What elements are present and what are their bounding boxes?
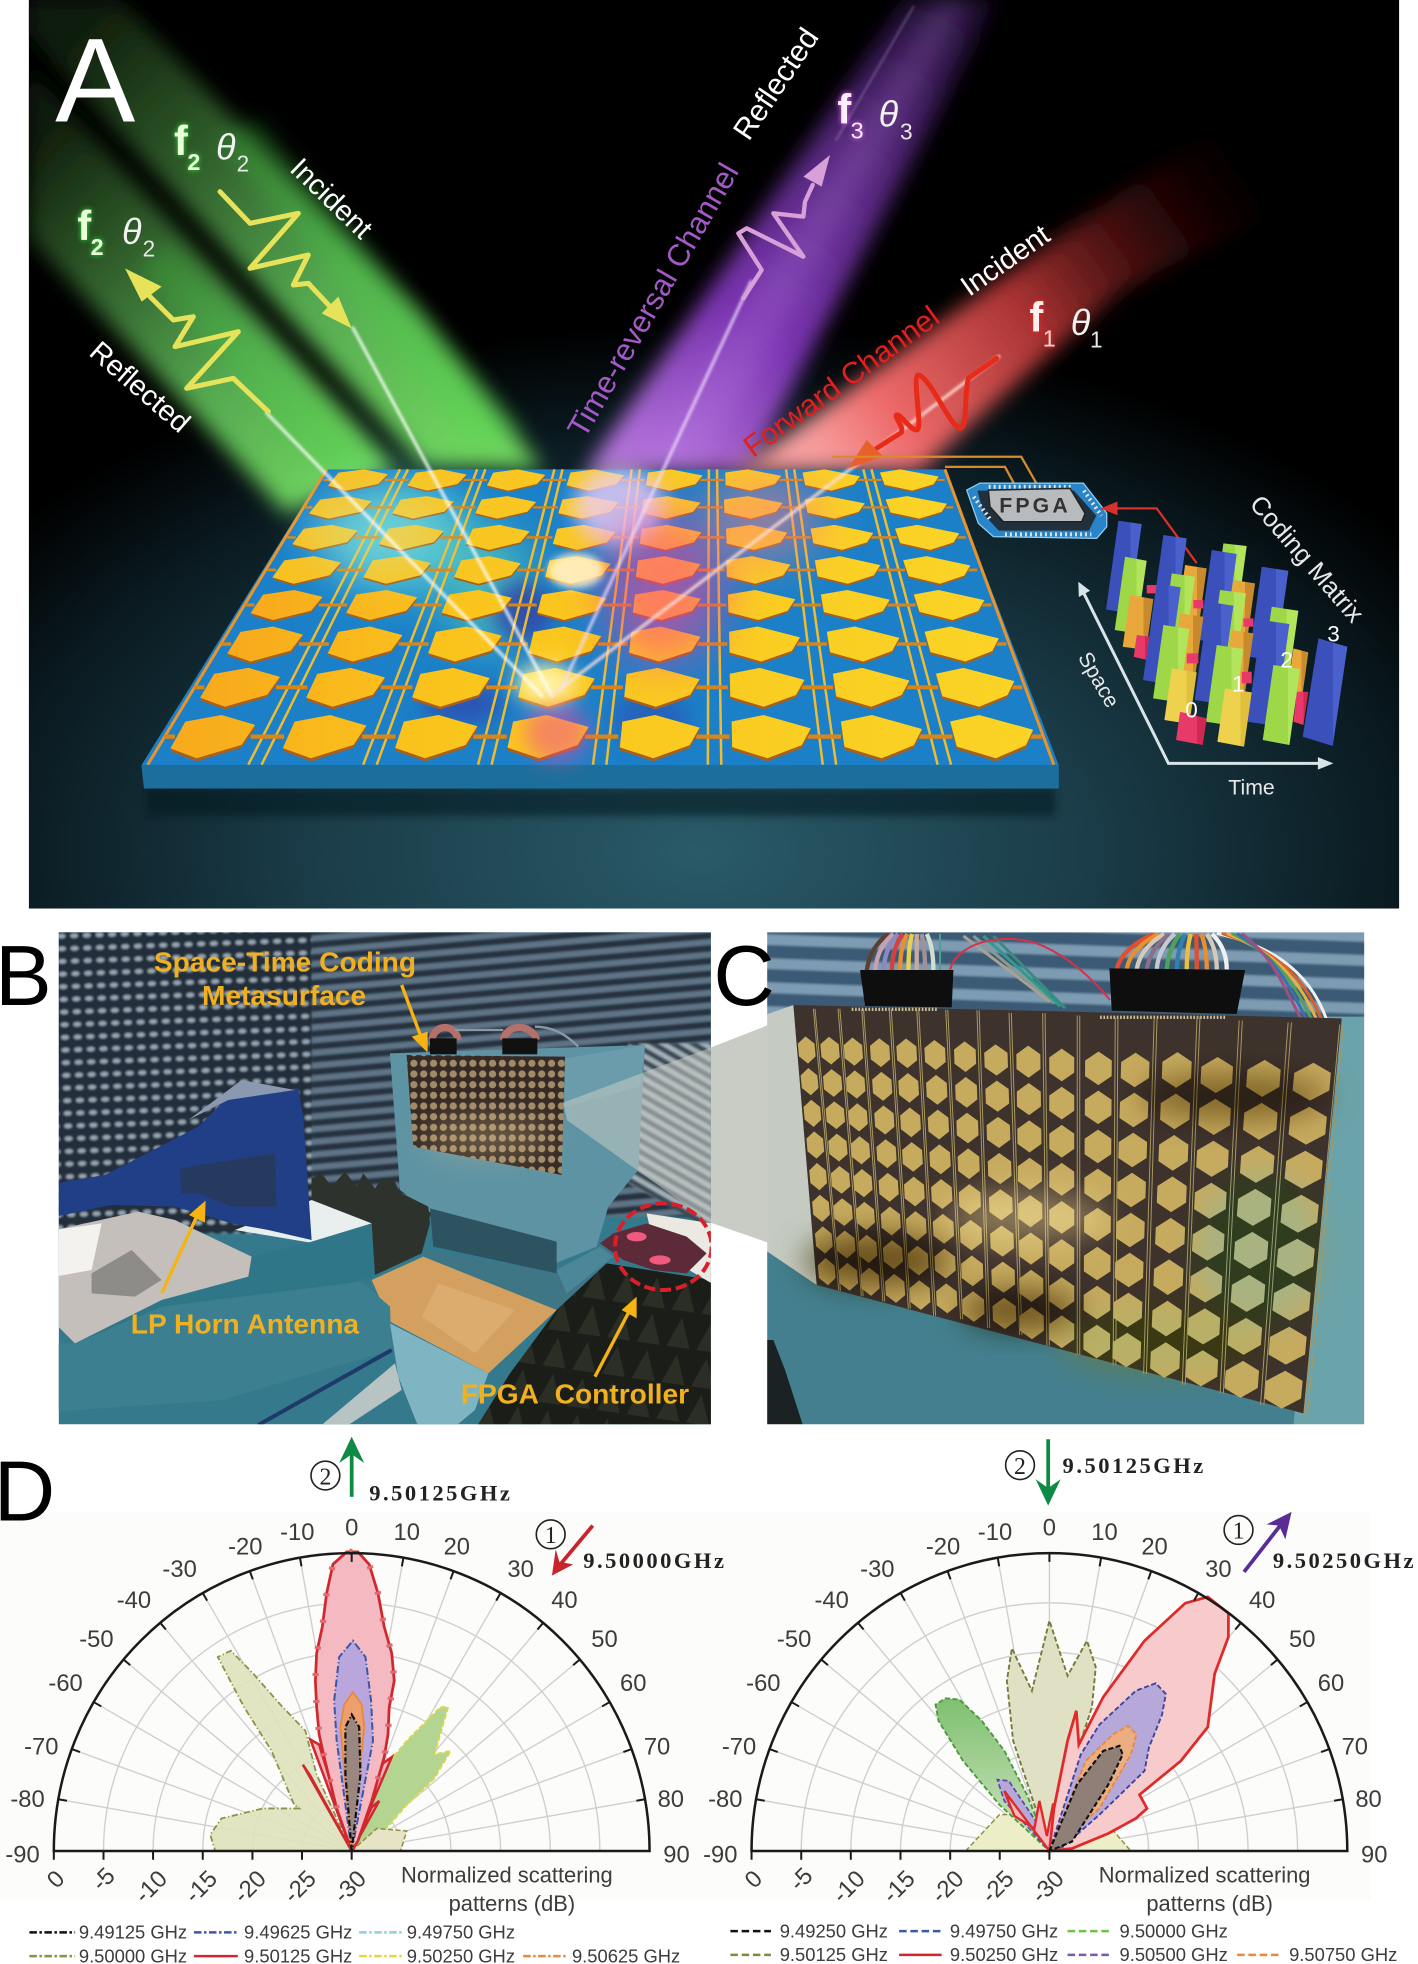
polar grid left <box>58 1553 645 1851</box>
FPGA controller board <box>600 1223 707 1273</box>
background wall left <box>55 930 313 1233</box>
incident wave, green channel <box>220 192 352 328</box>
label f1 theta1: f <box>1029 294 1043 341</box>
legend right: 9.49750 GHz <box>950 1920 1058 1941</box>
FPGA chip <box>967 483 1107 538</box>
angle labels right: 80 <box>1355 1786 1382 1813</box>
label f1 theta1: 1 <box>1090 327 1103 353</box>
angle labels left: 40 <box>551 1587 578 1614</box>
angle labels right: -10 <box>978 1519 1012 1546</box>
bright reflection on patches <box>947 1190 1107 1243</box>
label space-time coding metasurface: Space-Time Coding <box>154 947 416 978</box>
dim reflection lower left <box>803 1233 950 1287</box>
green incident beam <box>29 0 543 469</box>
shadow under the board <box>148 788 1055 816</box>
lobe 9.50250 GHz <box>1049 1597 1228 1851</box>
bar level numbers <box>1185 621 1340 723</box>
axis title right <box>1099 1862 1310 1916</box>
black absorber cones <box>312 1172 430 1275</box>
angle labels right: -50 <box>777 1626 811 1653</box>
label f2 theta2 incident: f <box>174 117 188 164</box>
polar frame left <box>54 1553 650 1860</box>
label f2 theta2 incident: 2 <box>237 151 249 177</box>
label f2 theta2 reflected <box>77 202 155 262</box>
angle labels right: 70 <box>1342 1734 1368 1761</box>
hexagon patch array <box>164 469 1041 761</box>
frequency label 9.50125 left: 9.50125GHz <box>369 1481 512 1506</box>
white top of foam step <box>235 1200 372 1243</box>
label f2 theta2 reflected: 2 <box>143 236 155 262</box>
label space-time coding metasurface: Metasurface <box>202 980 366 1011</box>
label f1 theta1 <box>1028 298 1102 350</box>
legend right <box>730 1920 1397 1964</box>
radial axis labels left: -10 <box>129 1865 173 1909</box>
dull top right reflection <box>1140 1073 1327 1120</box>
frequency label 9.50250: 9.50250GHz <box>1273 1548 1416 1573</box>
angle labels left: 50 <box>591 1626 618 1653</box>
radial axis labels left: -5 <box>87 1862 121 1896</box>
label time: Time <box>1228 776 1275 800</box>
label reflected green: Reflected <box>83 335 196 439</box>
circled 1 right <box>1224 1516 1253 1545</box>
white light patch on foam <box>55 1223 102 1277</box>
left connector <box>860 970 953 1007</box>
label coding matrix: Coding Matrix <box>1244 490 1369 628</box>
panel A background <box>29 0 1399 909</box>
angle labels left: -60 <box>48 1670 83 1697</box>
angle labels right: 0 <box>1043 1515 1056 1542</box>
label incident green: Incident <box>284 152 378 245</box>
circled 1 left: 1 <box>545 1523 557 1549</box>
wall floor behind wood <box>425 1250 602 1310</box>
radial axis labels right: -30 <box>1026 1865 1070 1909</box>
angle labels left <box>5 1515 690 1868</box>
radial axis labels right: -20 <box>926 1865 969 1909</box>
lobe 9.49250 GHz <box>1049 1746 1123 1851</box>
background wall right <box>312 930 712 1217</box>
back wall stripes <box>760 930 1370 1027</box>
label f2 theta2 incident: 2 <box>187 149 200 175</box>
metasurface board top <box>141 469 1059 765</box>
photo C background <box>760 930 1370 1427</box>
right ribbon cable <box>1117 934 1227 969</box>
axis title left <box>401 1862 613 1916</box>
radial axis labels left: 0 <box>42 1865 70 1894</box>
shadow patch on foam <box>92 1250 162 1297</box>
axis title right: Normalized scattering <box>1099 1862 1310 1887</box>
angle labels right: 40 <box>1249 1587 1275 1614</box>
panel A: space-time coding metasurface illustration <box>29 0 1399 909</box>
panel D right: polar scattering pattern <box>703 1515 1387 1916</box>
left ribbon cable <box>867 934 940 971</box>
low side lobe <box>966 1813 1131 1851</box>
angle labels right: 50 <box>1289 1626 1315 1653</box>
lobe 9.50000 GHz <box>936 1698 1049 1851</box>
lobe 9.49625 GHz <box>334 1641 373 1851</box>
dark corner <box>760 1340 803 1427</box>
legend left <box>29 1922 680 1964</box>
projection wedge in the gap <box>711 1025 768 1243</box>
label f2 theta2 reflected: f <box>77 202 91 249</box>
projection wedge in photo C <box>760 1005 817 1285</box>
panel D left: polar scattering pattern <box>5 1515 690 1916</box>
label f2 theta2 reflected: θ <box>122 211 142 252</box>
red incident beam <box>734 156 1240 470</box>
right trailing ribbon <box>1217 933 1327 1020</box>
radial axis labels right: 0 <box>740 1865 768 1894</box>
lobe 9.50500 GHz <box>1049 1683 1166 1851</box>
radial axis labels right: -5 <box>784 1862 818 1896</box>
projection wedge across photo B <box>563 1048 711 1223</box>
axis title right: patterns (dB) <box>1146 1891 1273 1916</box>
dim reflection lower centre <box>960 1290 1080 1330</box>
circled 2 right: 2 <box>1014 1454 1026 1480</box>
angle labels left: 90 <box>663 1841 690 1868</box>
frequency label 9.50125 right: 9.50125GHz <box>1063 1453 1206 1478</box>
polar grid right <box>756 1553 1343 1851</box>
lobe 9.50125 GHz <box>315 1552 394 1851</box>
patches <box>795 1008 1343 1416</box>
panel C: metasurface close-up <box>760 930 1370 1427</box>
teal ribbon cable <box>963 936 1065 1008</box>
angle labels left: 10 <box>394 1519 420 1546</box>
radial axis labels left: -30 <box>328 1865 372 1909</box>
angle labels left: 30 <box>507 1556 534 1583</box>
lobe 9.50125 GHz <box>1007 1621 1096 1851</box>
angle labels right: 20 <box>1141 1533 1168 1560</box>
label incident red: Incident <box>955 219 1056 303</box>
angle labels right: -90 <box>703 1841 737 1868</box>
label f3 theta3: 3 <box>851 117 864 143</box>
panel B: measurement photo <box>55 930 712 1427</box>
radial axis labels right <box>740 1862 1070 1909</box>
photo base <box>55 930 712 1427</box>
radial axis labels left <box>42 1862 372 1909</box>
white foam block <box>55 1212 252 1343</box>
red arrow <box>552 1526 593 1576</box>
angle labels right: -70 <box>722 1734 756 1761</box>
lobe 9.50625 GHz <box>340 1692 364 1851</box>
panel label C: C <box>713 929 775 1024</box>
reflected wave, purple channel <box>738 155 830 298</box>
angle labels left: -80 <box>10 1786 45 1813</box>
angle labels left: -50 <box>79 1626 114 1653</box>
label LP horn antenna: LP Horn Antenna <box>131 1308 359 1339</box>
angle labels right: 90 <box>1361 1841 1387 1868</box>
white floor strip <box>322 1363 402 1425</box>
label FPGA controller: FPGA Controller <box>461 1378 689 1409</box>
red wire <box>950 939 1110 1000</box>
red spikes <box>303 1740 392 1851</box>
foam tower <box>390 1045 645 1263</box>
angle labels left: 20 <box>444 1533 470 1560</box>
metasurface board side <box>141 765 1059 788</box>
greenish reflection <box>1197 1173 1323 1327</box>
lobe 9.50000 GHz <box>210 1651 352 1851</box>
circled 2 left <box>311 1461 340 1490</box>
circled 1 right: 1 <box>1233 1519 1244 1545</box>
lobe 9.49125 GHz <box>345 1715 360 1851</box>
angle labels right: -30 <box>860 1556 895 1583</box>
incident wave, red channel <box>848 358 997 468</box>
radial axis labels right: -10 <box>827 1865 871 1909</box>
label f1 theta1: 1 <box>1043 326 1056 352</box>
gold bias lines <box>148 469 1054 765</box>
legend left: 9.49750 GHz <box>407 1922 515 1943</box>
coding matrix bars <box>1106 521 1347 747</box>
green arrow left <box>339 1437 364 1497</box>
frequency label 9.50000: 9.50000GHz <box>583 1548 726 1573</box>
angle labels left: -10 <box>280 1519 314 1546</box>
space and time axes <box>1078 582 1333 770</box>
black absorber floor <box>477 1263 712 1427</box>
radial axis labels right: -15 <box>877 1865 921 1909</box>
pale foam block <box>390 1323 488 1427</box>
lobe 9.50750 GHz <box>1049 1726 1136 1851</box>
angle labels left: -20 <box>228 1533 262 1560</box>
feed lines to FPGA <box>832 457 1036 483</box>
red control arrow <box>1103 503 1197 563</box>
label f2 theta2 incident <box>174 117 249 177</box>
label space: Space <box>1073 648 1124 712</box>
purple arrow <box>1244 1512 1292 1572</box>
radial axis labels left: -15 <box>180 1865 223 1909</box>
angle labels right <box>703 1515 1387 1868</box>
foam step one <box>75 1223 375 1343</box>
chart background <box>0 1512 1370 1900</box>
angle labels right: -40 <box>814 1587 849 1614</box>
angle labels right: -20 <box>926 1533 960 1560</box>
circled 1 left <box>536 1520 565 1549</box>
lower wall section <box>628 1043 712 1230</box>
legend left: 9.49125 GHz <box>79 1922 187 1943</box>
bar level numbers: 2 <box>1280 648 1293 673</box>
small purple lobe <box>997 1780 1049 1851</box>
purple reflected beam <box>586 0 995 471</box>
plastic wrap on horn <box>188 1080 295 1120</box>
under-tower dark band <box>430 1208 557 1273</box>
white area behind FPGA <box>647 1213 712 1283</box>
olive lower reflection <box>1060 1307 1260 1373</box>
legend left: 9.49625 GHz <box>244 1922 352 1943</box>
reflected wave, green channel <box>125 268 268 412</box>
tower foot <box>557 1247 613 1293</box>
miniature metasurface <box>407 1055 565 1175</box>
wood floor <box>372 1257 557 1373</box>
polar frame right <box>752 1553 1347 1860</box>
label f2 theta2 incident: θ <box>216 126 236 167</box>
radial axis labels left: -20 <box>228 1865 272 1909</box>
red sidelobes <box>1004 1791 1056 1851</box>
FPGA dashed circle <box>615 1203 712 1290</box>
FPGA led glow <box>627 1232 671 1265</box>
label time-reversal channel: Time-reversal Channel <box>560 157 746 443</box>
angle labels right: -80 <box>708 1786 742 1813</box>
angle labels right: -60 <box>746 1670 780 1697</box>
angle labels left: -40 <box>117 1587 151 1614</box>
label forward channel: Forward Channel <box>737 299 946 464</box>
legend right: 9.49250 GHz <box>780 1920 888 1941</box>
angle labels left: 70 <box>644 1734 670 1761</box>
radial axis labels right: -25 <box>976 1865 1020 1909</box>
axis title left: Normalized scattering <box>401 1862 613 1887</box>
angle labels left: -90 <box>5 1841 40 1868</box>
radial axis labels left: -25 <box>278 1865 322 1909</box>
arrows in photo B <box>162 985 637 1377</box>
legend right: 9.50000 GHz <box>1120 1920 1228 1941</box>
horn antenna body <box>55 1088 312 1240</box>
label f3 theta3: θ <box>879 94 899 135</box>
small lobe right <box>352 1828 407 1851</box>
label f2 theta2 reflected: 2 <box>91 234 104 260</box>
label f3 theta3 <box>837 85 913 144</box>
angle labels right: 30 <box>1205 1556 1232 1583</box>
pin headers <box>852 1009 1227 1017</box>
angle labels right: 60 <box>1318 1670 1344 1697</box>
label f3 theta3: 3 <box>900 118 913 144</box>
circled 2 right <box>1006 1451 1034 1480</box>
FPGA chip: FPGA <box>999 493 1071 517</box>
axis title left: patterns (dB) <box>449 1891 575 1916</box>
foam step two <box>55 1282 392 1412</box>
navy floor strip <box>258 1350 392 1425</box>
white beam cores <box>267 6 999 696</box>
label space-time coding metasurface <box>154 947 416 1011</box>
angle labels left: 0 <box>345 1515 358 1542</box>
angle labels left: -30 <box>162 1556 197 1583</box>
horn mount block <box>180 1153 277 1207</box>
bar level numbers: 3 <box>1327 621 1340 646</box>
panel label A: A <box>55 13 135 147</box>
green arrow right <box>1036 1439 1061 1506</box>
metasurface board <box>793 1005 1342 1413</box>
coloured glow on the board substrate <box>325 482 688 747</box>
bar level numbers: 0 <box>1185 698 1198 723</box>
angle labels left: 80 <box>658 1786 684 1813</box>
label f1 theta1: θ <box>1071 302 1091 343</box>
label reflected purple: Reflected <box>727 22 825 146</box>
right connector <box>1109 968 1245 1014</box>
miniature connectors <box>430 1038 537 1054</box>
foam tower top side <box>565 1045 645 1107</box>
lobe 9.50250 GHz <box>352 1707 451 1851</box>
bar level numbers: 1 <box>1232 671 1245 696</box>
circled 2 left: 2 <box>319 1464 331 1490</box>
green reflected beam <box>29 68 397 513</box>
foam behind board <box>1293 1017 1370 1427</box>
miniature ribbon cables <box>432 1027 578 1047</box>
label f3 theta3: f <box>837 85 851 132</box>
angle labels left: 60 <box>620 1670 647 1697</box>
angle labels right: 10 <box>1091 1519 1118 1546</box>
angle labels left: -70 <box>24 1734 58 1761</box>
coloured light spots on the board <box>307 467 824 762</box>
